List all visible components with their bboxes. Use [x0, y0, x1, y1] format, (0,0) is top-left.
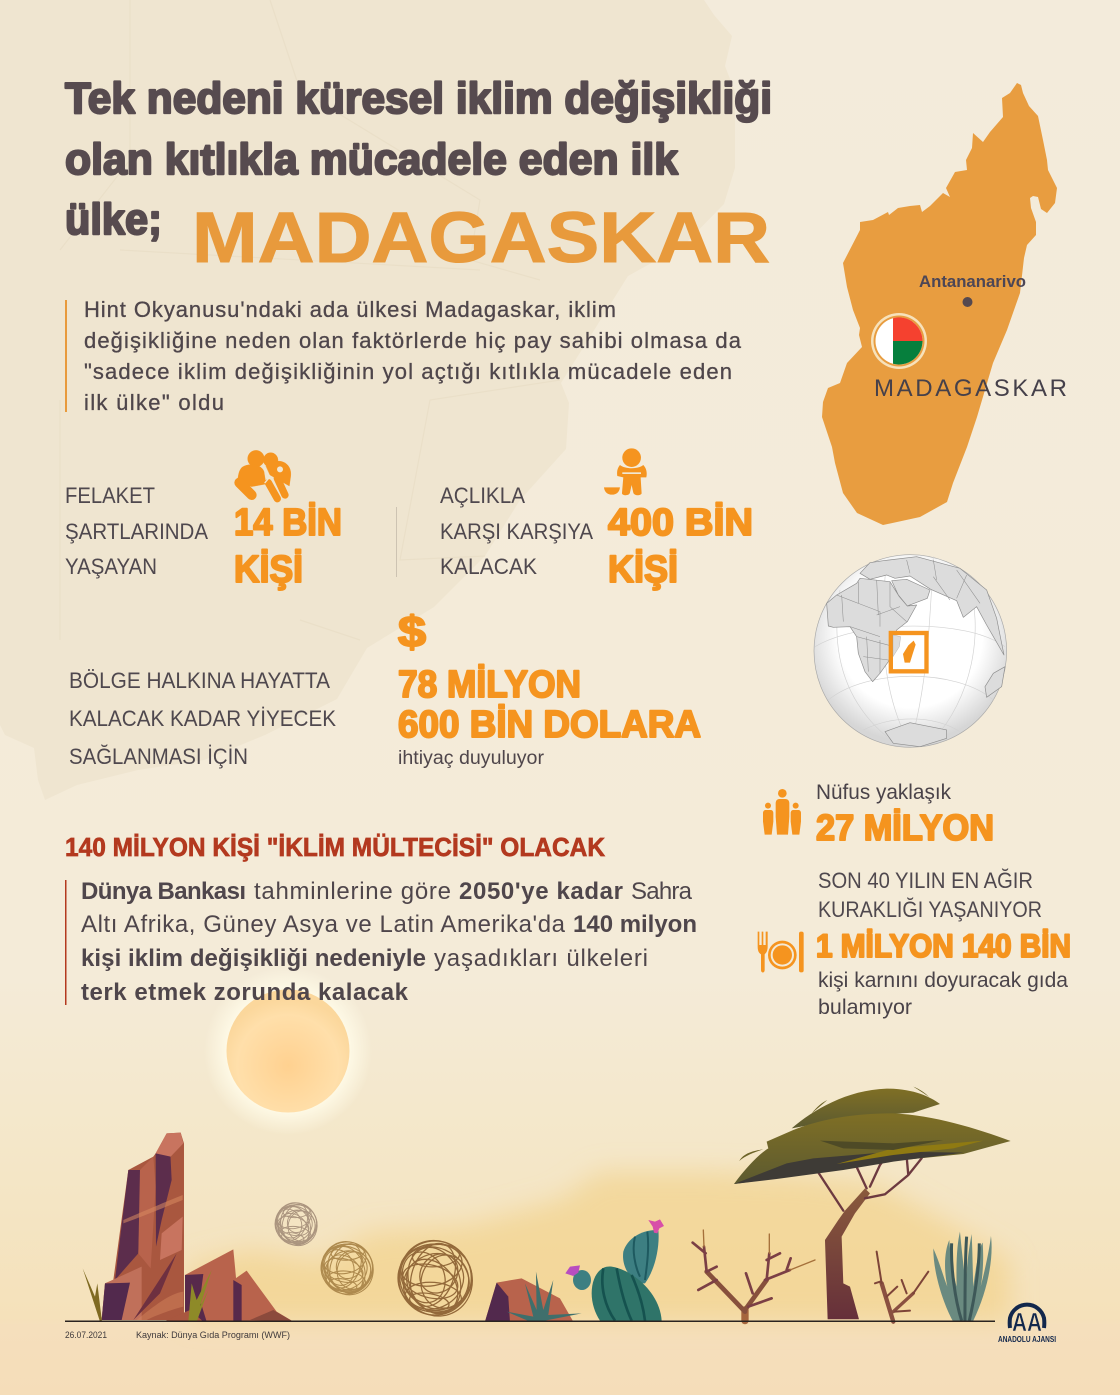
title line 1: Tek nedeni küresel iklim değişikliği [65, 74, 772, 123]
value: 27 MİLYON [816, 807, 994, 848]
caption: bulamıyor [818, 996, 912, 1019]
section text: 2050'ye kadar [459, 878, 623, 905]
locator box [891, 633, 926, 671]
heading: KURAKLIĞI YAŞANIYOR [818, 897, 1042, 922]
illustration: cacti [565, 1219, 664, 1321]
graticule [815, 557, 1005, 745]
value: 14 BİN [234, 502, 342, 544]
icon: hungry crouching person with bowl [604, 448, 647, 495]
section text: Sahra [631, 878, 693, 905]
section text: 140 milyon [573, 911, 697, 938]
label: FELAKET [65, 483, 155, 508]
section text: kişi iklim değişikliği nedeniyle [81, 945, 426, 972]
date: 26.07.2021 [65, 1330, 107, 1340]
icon: people [763, 789, 801, 835]
section text: tahminlerine göre [254, 878, 451, 905]
intro text: değişikliğine neden olan faktörlerde hiç pay sahibi olmasa da [84, 328, 742, 353]
climate refugees section [65, 832, 697, 1006]
illustration: acacia tree [734, 1087, 1011, 1319]
canopy [792, 1089, 940, 1128]
label: BÖLGE HALKINA HAYATTA [69, 668, 330, 693]
Madagascar marker [903, 641, 916, 663]
sun [204, 967, 372, 1135]
title [65, 74, 772, 278]
logo: Anadolu Ajansi: AA [1012, 1307, 1042, 1337]
caption: ihtiyaç duyuluyor [398, 748, 545, 769]
country label: MADAGASKAR [874, 375, 1067, 402]
label: ŞARTLARINDA [65, 519, 208, 544]
title country name: MADAGASKAR [192, 199, 770, 278]
Africa coast in box [893, 635, 901, 657]
label: YAŞAYAN [65, 554, 157, 579]
stat: people facing hunger [440, 448, 753, 591]
illustration: small rock with agave [485, 1272, 582, 1322]
label: KARŞI KARŞIYA [440, 519, 593, 544]
accent bar [65, 300, 67, 412]
label: KALACAK KADAR YİYECEK [69, 706, 336, 731]
grass tufts [83, 1268, 102, 1322]
land masses [827, 557, 1005, 747]
logo: Anadolu Ajansi [998, 1305, 1056, 1344]
illustration: rocks [83, 1133, 293, 1322]
illustration: tumbleweeds [268, 1195, 486, 1329]
intro text: Hint Okyanusu'ndaki ada ülkesi Madagaskar, iklim [84, 297, 616, 322]
section text: Dünya Bankası [81, 878, 246, 905]
value: 600 BİN DOLARA [398, 704, 701, 746]
heading: SON 40 YILIN EN AĞIR [818, 868, 1033, 893]
flowers [648, 1219, 664, 1233]
icon: plate and cutlery [758, 932, 804, 972]
source: Kaynak: Dünya Gıda Programı (WWF) [136, 1330, 290, 1340]
divider [396, 507, 397, 577]
label: SAĞLANMASI İÇİN [69, 744, 248, 769]
background: desert dust haze [190, 1172, 1010, 1320]
ground line [65, 1320, 995, 1322]
background map: faint borders [60, 0, 560, 640]
map: Madagascar [822, 83, 1067, 525]
stat: people in disaster conditions [65, 450, 342, 591]
stat: funding need [69, 608, 701, 769]
caption: kişi karnını doyuracak gıda [818, 969, 1068, 992]
illustration: agave plant [933, 1232, 992, 1321]
island silhouette [822, 83, 1057, 525]
intro text: "sadece iklim değişikliğinin yol açtığı kıtlıkla mücadele eden [84, 359, 732, 384]
country borders [837, 560, 980, 673]
title line 3: ülke; [65, 195, 162, 244]
stat: drought and food [758, 868, 1071, 1019]
logo: Anadolu Ajansi: ANADOLU AJANSI [998, 1334, 1056, 1344]
value: 1 MİLYON 140 BİN [816, 928, 1071, 964]
icon: dollar sign: $ [398, 608, 426, 657]
intro text: ilk ülke" oldu [84, 390, 224, 415]
capital dot [962, 297, 972, 307]
value: 78 MİLYON [398, 664, 581, 706]
value: KİŞİ [234, 549, 303, 591]
illustration: thorn bushes [693, 1230, 928, 1322]
background map: Africa silhouette [0, 0, 735, 800]
intro paragraph [65, 297, 742, 415]
label: AÇLIKLA [440, 483, 525, 508]
flag badge [871, 313, 927, 369]
value: 400 BİN [608, 502, 753, 544]
caption: Nüfus yaklaşık [816, 781, 951, 804]
icon: adult holding child [237, 450, 291, 499]
section text: Altı Afrika, Güney Asya ve Latin Amerika'da [81, 911, 566, 938]
value: KİŞİ [608, 549, 678, 591]
stat: population [763, 781, 994, 848]
globe locator [814, 555, 1007, 747]
trunk and branches [825, 1188, 870, 1319]
section text: terk etmek zorunda kalacak [81, 979, 409, 1006]
accent bar [65, 880, 66, 1005]
label: KALACAK [440, 554, 537, 579]
title line 2: olan kıtlıkla mücadele eden ilk [65, 135, 679, 184]
section heading: 140 MİLYON KİŞİ "İKLİM MÜLTECİSİ" OLACAK [65, 832, 605, 862]
section text: yaşadıkları ülkeleri [434, 945, 648, 972]
capital label: Antananarivo [919, 272, 1026, 291]
